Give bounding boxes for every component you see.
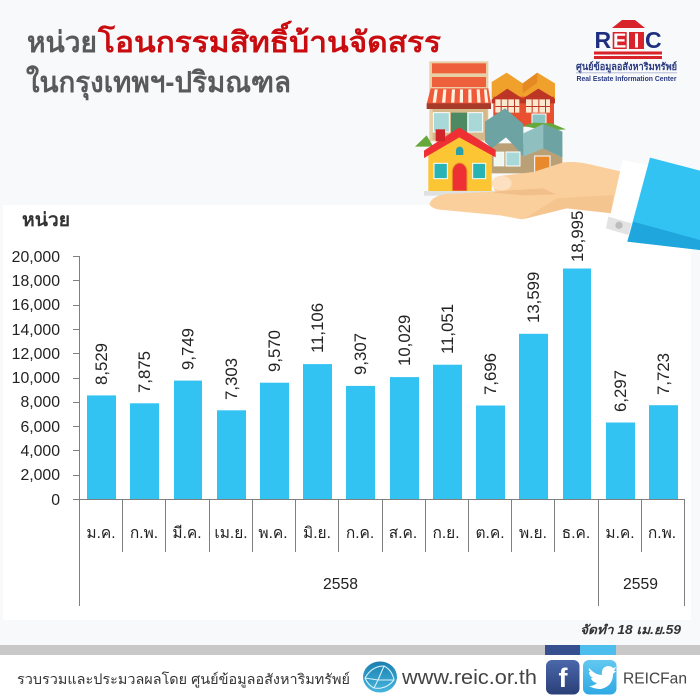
icon: shirt cuff and sleeve	[606, 158, 700, 250]
bar value labels: 9,749	[178, 328, 198, 370]
bar value labels: 7,696	[481, 353, 500, 395]
logo: REIC: E	[613, 30, 626, 52]
facebook page name: REICFan	[623, 670, 687, 688]
y axis labels: 2,000	[20, 467, 60, 484]
footer band	[0, 645, 700, 700]
bar value labels: 18,995	[568, 211, 587, 262]
month labels: ธ.ค.	[562, 525, 590, 542]
bar value labels: 11,051	[438, 304, 457, 354]
bar value labels: 13,599	[524, 272, 543, 323]
icon: orange townhouses	[492, 73, 566, 131]
bar chart	[87, 268, 678, 499]
axis lines	[73, 256, 684, 606]
icon: houses on hand	[415, 61, 700, 250]
y axis labels: 4,000	[20, 443, 60, 460]
bar value labels: 9,307	[351, 333, 370, 375]
month labels: ม.ค.	[86, 525, 116, 542]
bar value labels: 6,297	[611, 370, 630, 412]
icon: shop	[415, 61, 491, 147]
title	[26, 20, 441, 100]
icon: twitter	[583, 660, 616, 694]
icon: teal house	[485, 108, 562, 173]
month labels: ก.ค.	[346, 525, 374, 542]
y axis labels: 0	[51, 492, 60, 509]
bar value labels: 7,303	[222, 358, 241, 400]
month labels: มี.ค.	[172, 525, 202, 542]
icon: hand	[429, 162, 622, 219]
bar value labels	[92, 211, 673, 412]
month labels: เม.ย.	[214, 525, 248, 542]
y axis labels: 6,000	[20, 419, 60, 436]
heading: unit label: หน่วย	[22, 210, 70, 231]
month labels: ส.ค.	[389, 525, 417, 542]
title: โอนกรรมสิทธิ์บ้านจัดสรร	[97, 20, 441, 59]
logo: REIC: C	[645, 27, 662, 53]
month labels: ก.ย.	[432, 525, 460, 542]
icon: facebook: f	[558, 663, 568, 693]
month labels: พ.ย.	[519, 525, 547, 542]
bar value labels: 8,529	[92, 343, 111, 385]
website: www.reic.or.th	[401, 666, 537, 689]
month labels: มิ.ย.	[303, 525, 331, 542]
icon: yellow house	[424, 127, 496, 196]
year labels: 2558	[323, 576, 358, 593]
year labels	[323, 576, 658, 593]
month labels: ก.พ.	[130, 525, 158, 542]
month labels	[86, 525, 676, 542]
bar value labels: 10,029	[395, 315, 414, 366]
year labels: 2559	[623, 576, 658, 593]
logo: REIC	[576, 20, 677, 83]
logo: REIC: R	[594, 27, 612, 53]
y axis labels: 18,000	[12, 273, 60, 290]
bar value labels: 7,723	[654, 353, 673, 395]
y axis labels	[12, 249, 60, 509]
month labels: ก.พ.	[648, 525, 676, 542]
bar value labels: 7,875	[135, 351, 154, 393]
title: ในกรุงเทพฯ-ปริมณฑล	[26, 65, 291, 100]
y axis labels: 14,000	[12, 322, 60, 339]
y axis labels: 12,000	[12, 346, 60, 363]
title: หน่วย	[27, 27, 97, 59]
y axis labels: 8,000	[20, 394, 60, 411]
y axis labels: 10,000	[12, 370, 60, 387]
icon: facebook	[546, 660, 580, 694]
month labels: พ.ค.	[258, 525, 288, 542]
note: date: จัดทำ 18 เม.ย.59	[580, 623, 681, 637]
y axis labels: 20,000	[12, 249, 60, 266]
logo: REIC: Real Estate Information Center	[576, 74, 677, 83]
month labels: ม.ค.	[605, 525, 635, 542]
panel: chart background	[3, 205, 691, 620]
month labels: ต.ค.	[475, 525, 505, 542]
footer credit: รวบรวมและประมวลผลโดย ศูนย์ข้อมูลอสังหาริมทรัพย์	[17, 671, 350, 688]
bar value labels: 11,106	[308, 303, 327, 353]
y axis labels: 16,000	[12, 297, 60, 314]
logo: REIC: ศูนย์ข้อมูลอสังหาริมทรัพย์	[576, 61, 677, 74]
logo: REIC: I	[634, 30, 639, 52]
bar value labels: 9,570	[265, 330, 284, 372]
icon: globe	[363, 662, 397, 692]
